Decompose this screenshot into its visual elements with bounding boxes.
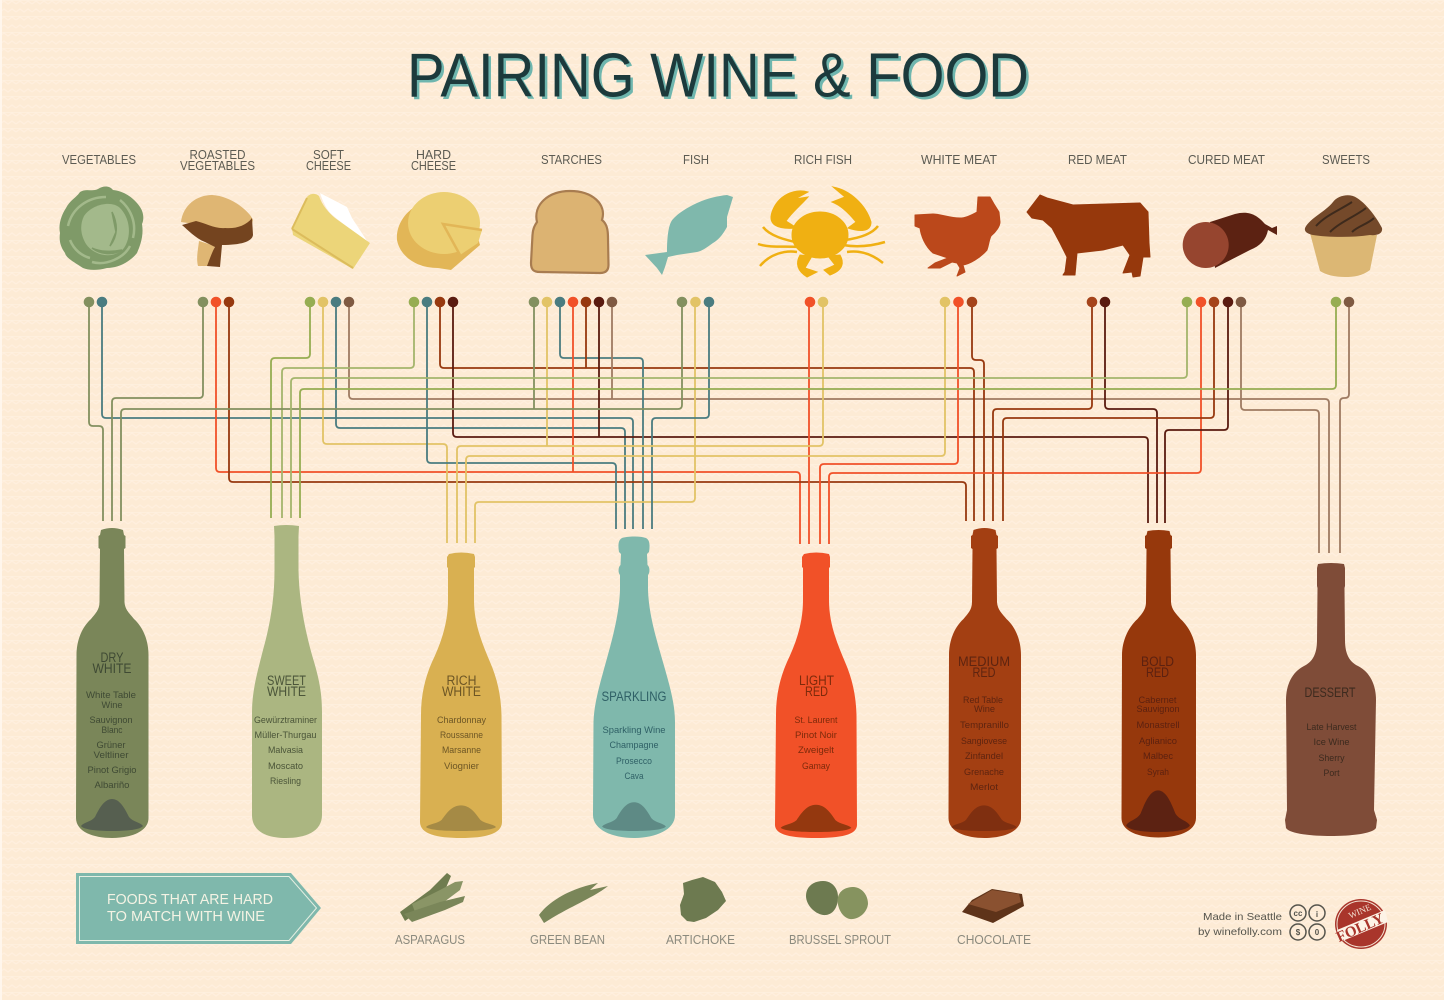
food category labels: VEGETABLES: [180, 159, 255, 173]
bottle: rich white: Marsanne: [442, 745, 481, 755]
bottle: medium red: Grenache: [964, 767, 1004, 777]
icon: fish: [645, 195, 733, 275]
bottle: light red: Zweigelt: [798, 745, 834, 755]
bottle: dry white: Veltliner: [94, 750, 128, 760]
bottle: sparkling: Sparkling Wine: [602, 725, 666, 735]
lines: white meat: [466, 302, 984, 544]
bottle: rich white: WHITE: [442, 684, 481, 699]
bottle: dessert: DESSERT: [1304, 685, 1356, 700]
bottle: light red: Gamay: [802, 761, 830, 771]
hard-to-match food labels: BRUSSEL SPROUT: [789, 933, 891, 947]
icon: mushroom: [181, 195, 253, 267]
bottle: medium red: Sangiovese: [961, 736, 1007, 746]
bottle: light red: RED: [805, 684, 828, 699]
icon: cupcake: [1305, 195, 1382, 277]
bottle: medium red: Zinfandel: [965, 751, 1003, 761]
food category labels: VEGETABLES: [62, 153, 136, 167]
food category labels: FISH: [683, 153, 709, 167]
bottle: rich white: RICH: [446, 673, 476, 688]
bottle: medium red: Wine: [974, 704, 995, 714]
bottle: sweet white: Riesling: [270, 776, 301, 786]
lines: soft cheese: [271, 302, 1329, 553]
bottle: dry white: White Table: [86, 690, 136, 700]
bottle: light red: Pinot Noir: [795, 730, 837, 740]
bottle: dessert: Sherry: [1318, 753, 1345, 763]
bottle: bold red: Syrah: [1147, 767, 1169, 777]
bottle: dry white: [76, 528, 148, 838]
bottle: bold red: [1122, 530, 1196, 838]
bottle: dry white: WHITE: [92, 661, 132, 676]
logo: wine folly badge: [1334, 899, 1388, 949]
credit text: by winefolly.com: [1198, 926, 1282, 938]
connection lines between foods and wines: [89, 302, 1349, 553]
hard-to-match food labels: ARTICHOKE: [666, 933, 735, 947]
food category labels: SOFT: [313, 148, 344, 162]
bottle: sweet white: WHITE: [267, 684, 306, 699]
title: PAIRING WINE & FOOD: [410, 44, 1032, 113]
lines: rich fish: [457, 302, 823, 544]
icon: cow: [1027, 195, 1150, 277]
bottle: light red: [775, 552, 857, 838]
logo: wine folly badge: WINE: [1347, 902, 1373, 921]
bottle: light red: St. Laurent: [794, 715, 838, 725]
bottle: dry white: DRY: [100, 650, 124, 665]
bottle: sparkling: Prosecco: [616, 756, 652, 766]
bottle: dessert: Ice Wine: [1314, 737, 1350, 747]
icon: chocolate: [962, 889, 1024, 923]
icon: chicken: [915, 197, 1000, 276]
food category labels: [62, 148, 1370, 173]
food category labels: RED MEAT: [1068, 153, 1127, 167]
bottle: bold red: Malbec: [1143, 751, 1173, 761]
icon: cabbage: [59, 186, 143, 270]
food category labels: ROASTED: [190, 148, 246, 162]
bottle: rich white: Chardonnay: [437, 715, 486, 725]
bottle: bold red: Monastrell: [1136, 720, 1180, 730]
bottle: sparkling: [593, 536, 675, 838]
credit text: Made in Seattle: [1203, 911, 1282, 923]
food category labels: SWEETS: [1322, 153, 1370, 167]
bottle: bold red: Cabernet: [1138, 695, 1177, 705]
icon: crab: [758, 187, 885, 277]
bottle: dry white: Blanc: [102, 725, 123, 735]
bottle: dessert: [1285, 563, 1377, 836]
bottle: medium red: Tempranillo: [960, 720, 1009, 730]
hard-to-match food labels: GREEN BEAN: [530, 933, 605, 947]
icon: creative commons: i: [1316, 910, 1318, 919]
icon: artichoke: [680, 877, 726, 922]
icon: creative commons: [1290, 905, 1325, 940]
food category labels: CHEESE: [306, 159, 351, 173]
lines: sweets: [300, 302, 1349, 553]
lines: cured meat: [291, 302, 1319, 553]
icon: brussel sprouts: [806, 881, 868, 919]
lines: roasted vegetables: [112, 302, 966, 544]
bottle: sparkling: SPARKLING: [602, 689, 666, 704]
lines: starches: [534, 302, 643, 529]
connector dots: [84, 297, 1354, 307]
food category labels: RICH FISH: [794, 153, 852, 167]
icon: hard cheese: [397, 192, 482, 270]
bottle: light red: LIGHT: [799, 673, 834, 688]
food category labels: CURED MEAT: [1188, 153, 1265, 167]
bottle: sparkling: Cava: [624, 771, 644, 781]
bottle: bold red: BOLD: [1141, 654, 1174, 669]
bottle: sparkling: Champagne: [610, 740, 658, 750]
bottle: medium red: RED: [972, 665, 996, 680]
icon: creative commons: cc: [1294, 909, 1303, 918]
credit text: [1198, 911, 1282, 938]
bottle: bold red: Aglianico: [1139, 736, 1177, 746]
bottle: sweet white: Gewürztraminer: [254, 715, 317, 725]
food category labels: WHITE MEAT: [921, 153, 997, 167]
bottle: dry white: Pinot Grigio: [88, 765, 136, 775]
banner: foods hard to match: FOODS THAT ARE HARD: [107, 891, 273, 908]
bottle: rich white: Viognier: [444, 761, 479, 771]
bottle: medium red: Merlot: [970, 782, 998, 792]
icon: salami: [1183, 213, 1277, 268]
bottle: bold red: Sauvignon: [1136, 704, 1180, 714]
bottle: medium red: Red Table: [963, 695, 1003, 705]
bottle: dry white: Albariño: [94, 780, 130, 790]
icon: bread: [531, 191, 608, 273]
icon: green bean: [539, 883, 608, 923]
bottle: medium red: MEDIUM: [958, 654, 1010, 669]
bottle: sweet white: Moscato: [268, 761, 303, 771]
title: PAIRING WINE & FOOD: [407, 42, 1029, 110]
logo: wine folly badge: FOLLY: [1334, 911, 1387, 946]
bottle: sweet white: [252, 525, 322, 838]
hard-to-match food labels: CHOCOLATE: [957, 933, 1031, 947]
bottle: medium red: [948, 528, 1021, 838]
bottle: dessert: Port: [1324, 768, 1340, 778]
food category labels: CHEESE: [411, 159, 456, 173]
food category labels: HARD: [416, 148, 451, 162]
bottle: rich white: [420, 552, 502, 838]
bottle: sweet white: Malvasia: [268, 745, 304, 755]
bottle: dry white: Grüner: [96, 740, 126, 750]
lines: vegetables: [89, 302, 633, 529]
icon: soft cheese: [292, 193, 370, 269]
bottle: sweet white: SWEET: [267, 673, 306, 688]
bottle: dry white: Sauvignon: [90, 715, 132, 725]
bottle: bold red: RED: [1146, 665, 1169, 680]
lines: fish: [121, 302, 709, 543]
bottle: dessert: Late Harvest: [1306, 722, 1357, 732]
icon: creative commons: 0: [1315, 928, 1320, 937]
bottle: dry white: Wine: [102, 700, 122, 710]
lines: red meat: [993, 302, 1157, 523]
lines: hard cheese: [282, 302, 1148, 529]
banner: foods hard to match: [76, 873, 321, 944]
icon: asparagus: [400, 873, 465, 922]
bottle: sweet white: Müller-Thurgau: [254, 730, 316, 740]
bottle: rich white: Roussanne: [440, 730, 483, 740]
hard-to-match food labels: [395, 933, 1031, 947]
food category labels: STARCHES: [541, 153, 602, 167]
banner: foods hard to match: TO MATCH WITH WINE: [107, 908, 265, 925]
hard-to-match food labels: ASPARAGUS: [395, 933, 465, 947]
icon: creative commons: $: [1296, 928, 1301, 937]
